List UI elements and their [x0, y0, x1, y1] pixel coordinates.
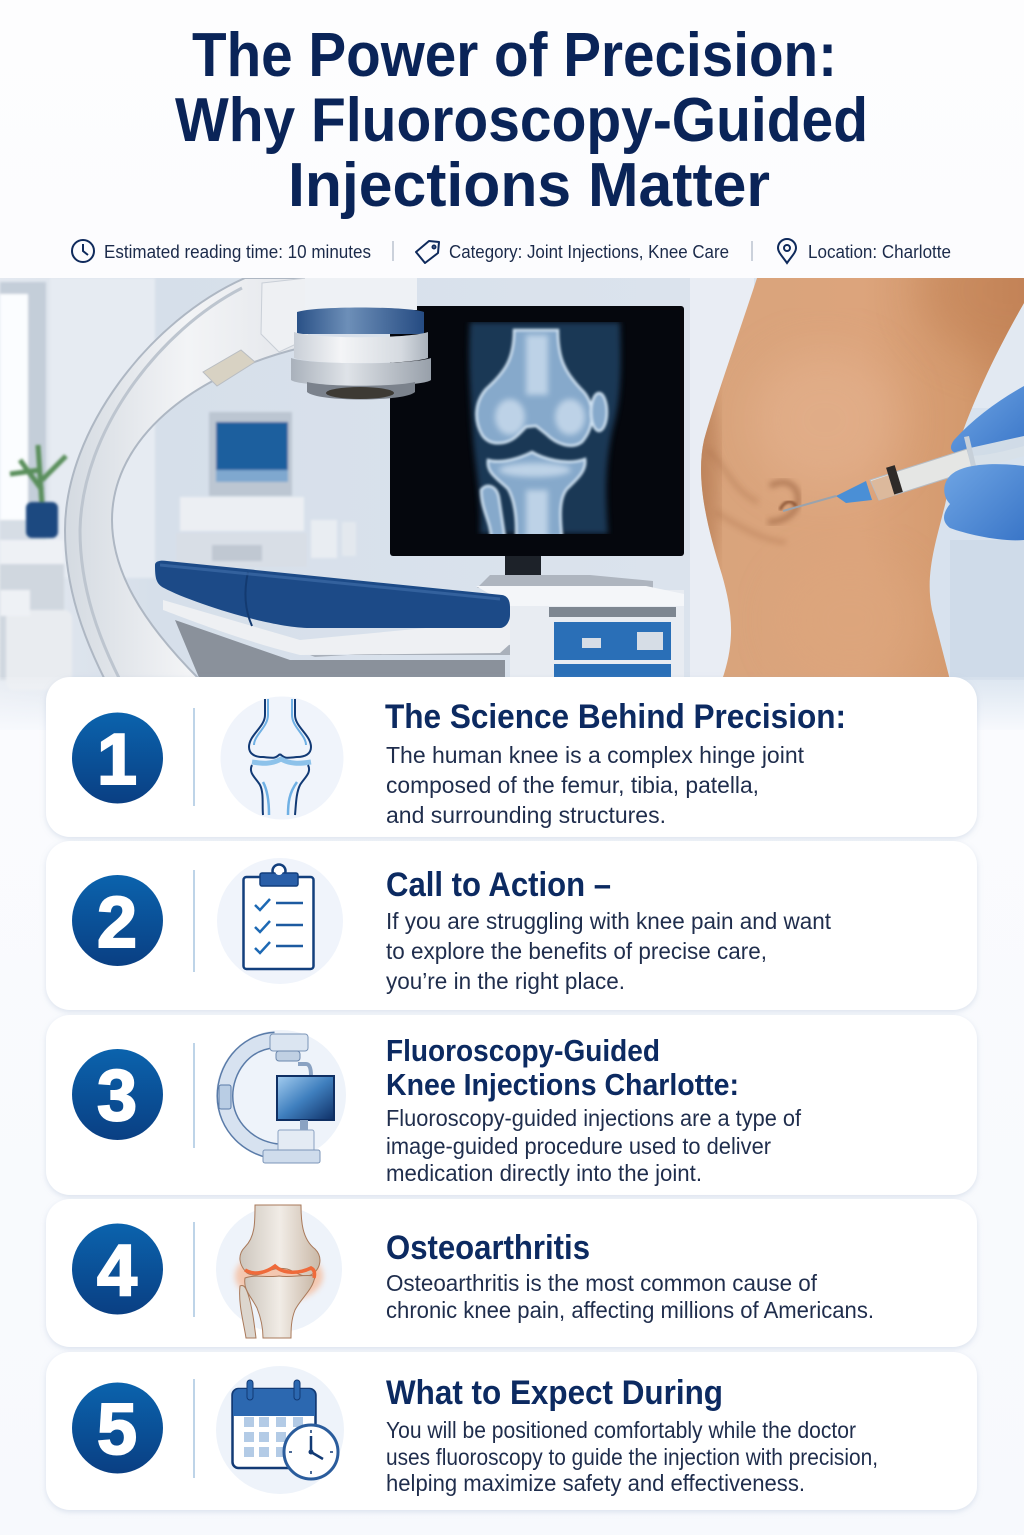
card 2 body: If you are struggling with knee pain and want [386, 908, 832, 934]
title: The Power of Precision: [192, 21, 837, 90]
number 3 [72, 1049, 163, 1140]
card 4 body: chronic knee pain, affecting millions of Americans. [386, 1297, 874, 1323]
card 3 body [386, 1105, 802, 1186]
card 3 body: medication directly into the joint. [386, 1160, 702, 1186]
card 4 body [386, 1270, 874, 1323]
card 1: The Science Behind Precision [46, 677, 977, 837]
gloved hand with syringe [783, 386, 1024, 540]
medical cart [476, 586, 684, 680]
card 4 heading: Osteoarthritis [386, 1229, 590, 1267]
icon: inflamed knee bones [216, 1205, 342, 1338]
number 5 [72, 1382, 163, 1474]
left base [0, 590, 72, 690]
number 5: 5 [97, 1390, 137, 1470]
card 2: Call to Action [46, 841, 977, 1010]
title: Injections Matter [288, 151, 770, 220]
meta row [72, 239, 951, 263]
card 3 heading: Fluoroscopy-Guided [386, 1033, 660, 1068]
number 1 [72, 712, 163, 804]
meta: location: Location: Charlotte [808, 242, 951, 262]
card 4: Osteoarthritis [46, 1199, 977, 1347]
knee [701, 278, 1024, 677]
icon: location pin [778, 239, 796, 263]
icon: tag [416, 241, 439, 263]
card 1 body: The human knee is a complex hinge joint [386, 742, 805, 768]
number 3: 3 [97, 1056, 137, 1136]
number 2: 2 [97, 883, 137, 963]
icon: knee joint outline [220, 696, 344, 820]
plant [10, 445, 66, 538]
card 5 heading: What to Expect During [386, 1374, 723, 1412]
window [0, 282, 64, 680]
main monitor with knee x-ray [390, 306, 684, 588]
card 5 body: uses fluoroscopy to guide the injection with precision, [386, 1444, 878, 1470]
icon: c-arm machine [216, 1030, 346, 1163]
number 1: 1 [97, 720, 137, 800]
number 4: 4 [97, 1231, 137, 1311]
number 2 [72, 875, 163, 966]
card 1 body: composed of the femur, tibia, patella, [386, 772, 759, 798]
title [175, 21, 868, 220]
icon: calendar and clock [216, 1366, 344, 1494]
card 1 body [386, 742, 805, 828]
card 3: Fluoroscopy-Guided Knee Injections Charlotte [46, 1015, 977, 1195]
meta: reading time: Estimated reading time: 10 minutes [104, 242, 371, 262]
c-arm gantry [65, 278, 310, 680]
card 3 body: Fluoroscopy-guided injections are a type of [386, 1105, 802, 1131]
room wall [0, 278, 1024, 730]
photo bottom fade [0, 677, 1024, 730]
exam table [155, 561, 510, 680]
card 5 body: You will be positioned comfortably while the doctor [386, 1417, 856, 1443]
icon: clock [72, 240, 94, 262]
card 5 body [386, 1417, 878, 1496]
number 4 [72, 1224, 163, 1314]
card 5: What to Expect During [46, 1352, 977, 1510]
card 2 body: to explore the benefits of precise care, [386, 938, 767, 964]
card 2 heading: Call to Action – [386, 866, 611, 904]
card 3 body: image-guided procedure used to deliver [386, 1133, 771, 1159]
background monitor and cabinet [176, 412, 356, 567]
title: Why Fluoroscopy-Guided [175, 86, 868, 155]
card 2 body: you’re in the right place. [386, 968, 625, 994]
meta: category: Category: Joint Injections, Knee Care [449, 242, 729, 262]
card 4 body: Osteoarthritis is the most common cause of [386, 1270, 818, 1296]
card 1 body: and surrounding structures. [386, 802, 666, 828]
card 1 heading: The Science Behind Precision: [385, 698, 846, 736]
icon: clipboard checklist [217, 858, 343, 984]
card 3 heading: Knee Injections Charlotte: [386, 1067, 739, 1102]
card 3 heading [386, 1033, 739, 1102]
hero photo: clinic room with knee injection [0, 278, 1024, 715]
x-ray detector column [291, 278, 431, 400]
card 5 body: helping maximize safety and effectiveness. [386, 1470, 805, 1496]
card 2 body [386, 908, 832, 994]
